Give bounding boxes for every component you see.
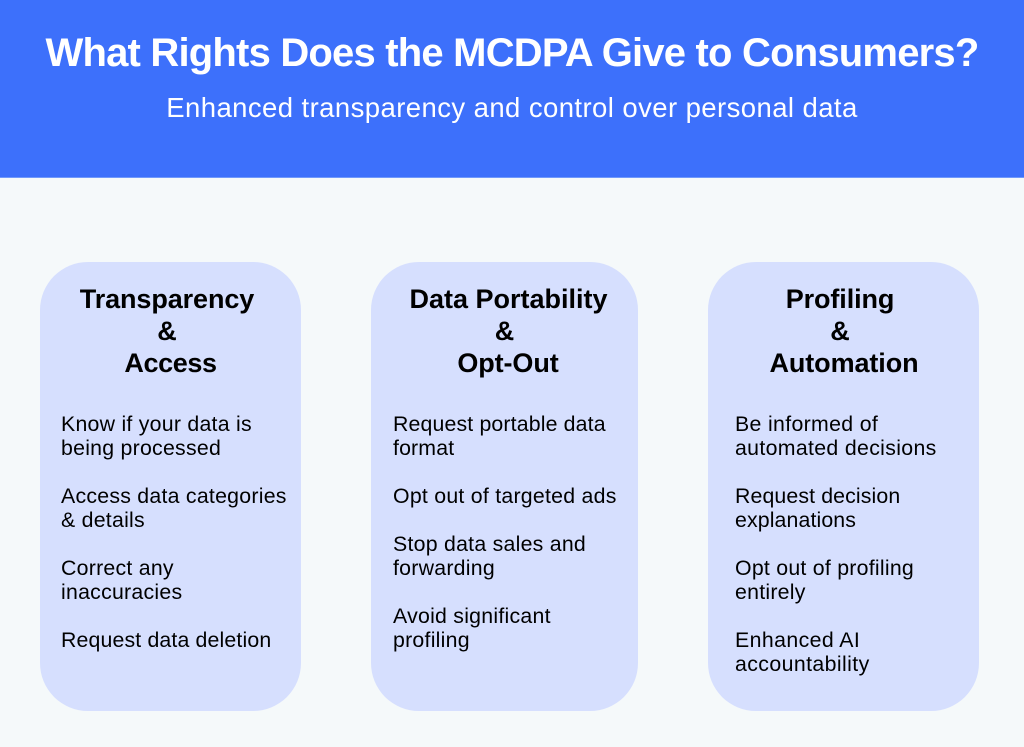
text: AI accountability: Enhanced AI [735, 628, 860, 652]
panel: data portability and opt-out [371, 262, 638, 711]
text: decision explanations [735, 484, 900, 532]
heading: data portability and opt-out [409, 284, 608, 378]
heading: data portability and opt-out: & [495, 316, 514, 346]
heading: transparency and access: Transparency [80, 284, 254, 314]
text: avoid profiling: profiling [393, 628, 470, 652]
heading: profiling and automation: Automation [770, 348, 918, 378]
text: automated decisions: automated decisions [735, 436, 937, 460]
text: portable data format: format [393, 436, 454, 460]
text: avoid profiling [393, 604, 551, 652]
text: know if data is processed: Know if your data is [61, 412, 252, 436]
heading: transparency and access: Access [124, 348, 217, 378]
text: decision explanations: Request decision [735, 484, 900, 508]
text: access data categories: Access data categories [61, 484, 287, 508]
text: automated decisions: Be informed of [735, 412, 878, 436]
heading: data portability and opt-out: Opt-Out [457, 348, 559, 378]
heading: data portability and opt-out: Data Portability [409, 284, 608, 314]
heading: profiling and automation [770, 284, 918, 378]
heading: profiling and automation: & [830, 316, 850, 346]
text: opt out of targeted ads: Opt out of targeted ads [393, 484, 617, 508]
heading: transparency and access: & [157, 316, 177, 346]
text: access data categories [61, 484, 287, 532]
text: avoid profiling: Avoid significant [393, 604, 551, 628]
text: portable data format: Request portable data [393, 412, 606, 436]
text: opt out of profiling: entirely [735, 580, 806, 604]
heading: transparency and access [80, 284, 254, 378]
panel: profiling and automation [708, 262, 979, 711]
text: correct inaccuracies: inaccuracies [61, 580, 182, 604]
text: correct inaccuracies: Correct any [61, 556, 174, 580]
text: access data categories: & details [61, 508, 145, 532]
title: What Rights Does the MCDPA Give to Consumers? [46, 31, 978, 75]
text: AI accountability: accountability [735, 652, 870, 676]
text: know if data is processed: being processed [61, 436, 221, 460]
panel: transparency and access [40, 262, 301, 711]
heading: profiling and automation: Profiling [786, 284, 894, 314]
text: stop data sales: Stop data sales and [393, 532, 586, 556]
text: opt out of profiling [735, 556, 914, 604]
text: request deletion: Request data deletion [61, 628, 271, 652]
header banner [0, 0, 1024, 178]
text: AI accountability [735, 628, 870, 676]
text: portable data format [393, 412, 606, 460]
text: stop data sales: forwarding [393, 556, 495, 580]
subtitle: Enhanced transparency and control over personal data [166, 92, 858, 123]
text: decision explanations: explanations [735, 508, 856, 532]
text: opt out of profiling: Opt out of profiling [735, 556, 914, 580]
text: stop data sales [393, 532, 586, 580]
text: know if data is processed [61, 412, 252, 460]
text: automated decisions [735, 412, 937, 460]
text: correct inaccuracies [61, 556, 182, 604]
